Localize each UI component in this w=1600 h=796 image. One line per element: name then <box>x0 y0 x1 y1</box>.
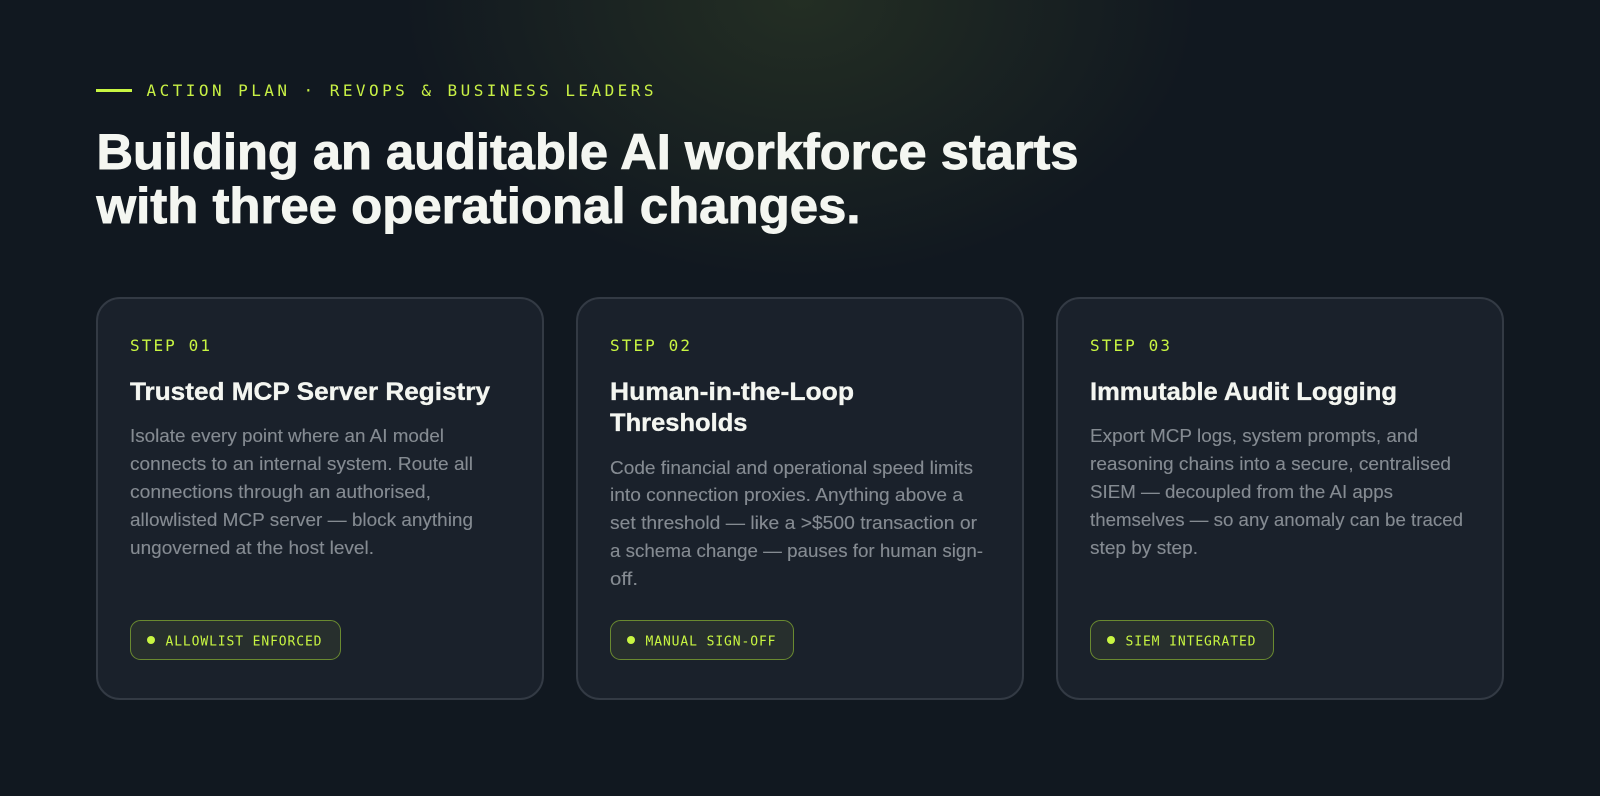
body text: ungoverned at the host level. <box>130 538 374 558</box>
top glow <box>300 0 1300 320</box>
eyebrow: ACTION PLAN · REVOPS & BUSINESS LEADERS <box>146 81 654 100</box>
body text <box>610 458 983 589</box>
body text: SIEM — decoupled from the AI apps <box>1090 482 1393 502</box>
body text: reasoning chains into a secure, centralised <box>1090 454 1451 474</box>
card heading: Thresholds <box>610 409 748 437</box>
badge <box>610 620 794 660</box>
title: with three operational changes. <box>95 178 860 234</box>
panel: step 02 <box>577 298 1023 699</box>
badge: ALLOWLIST ENFORCED <box>166 634 322 650</box>
card heading: Immutable Audit Logging <box>1090 378 1397 406</box>
badge: SIEM INTEGRATED <box>1126 634 1256 650</box>
header <box>95 81 1078 234</box>
body text: Code financial and operational speed limits <box>610 458 973 478</box>
step label: STEP 01 <box>130 336 210 355</box>
title <box>95 124 1078 234</box>
body text: Export MCP logs, system prompts, and <box>1090 426 1418 446</box>
step label: STEP 03 <box>1090 336 1170 355</box>
body text <box>1090 426 1463 558</box>
card heading: Human-in-the-Loop <box>610 378 854 406</box>
badge <box>130 620 340 660</box>
body text: into connection proxies. Anything above a <box>610 485 964 505</box>
badge: MANUAL SIGN-OFF <box>646 634 776 650</box>
step label: STEP 02 <box>610 336 690 355</box>
body text <box>130 426 473 558</box>
body text: connections through an authorised, <box>130 482 431 502</box>
body text: themselves — so any anomaly can be traced <box>1090 510 1463 530</box>
body text: set threshold — like a >$500 transaction or <box>610 513 977 533</box>
body text: allowlisted MCP server — block anything <box>130 510 473 530</box>
body text: off. <box>610 569 638 589</box>
panel: step 03 <box>1057 298 1503 699</box>
panel: step 01 <box>97 298 543 699</box>
body text: Isolate every point where an AI model <box>130 426 444 446</box>
card heading <box>610 378 854 437</box>
body text: step by step. <box>1090 538 1198 558</box>
body text: a schema change — pauses for human sign- <box>610 541 983 561</box>
title: Building an auditable AI workforce starts <box>96 124 1078 180</box>
badge <box>1090 620 1274 660</box>
card heading: Trusted MCP Server Registry <box>130 378 490 406</box>
body text: connects to an internal system. Route all <box>130 454 473 474</box>
